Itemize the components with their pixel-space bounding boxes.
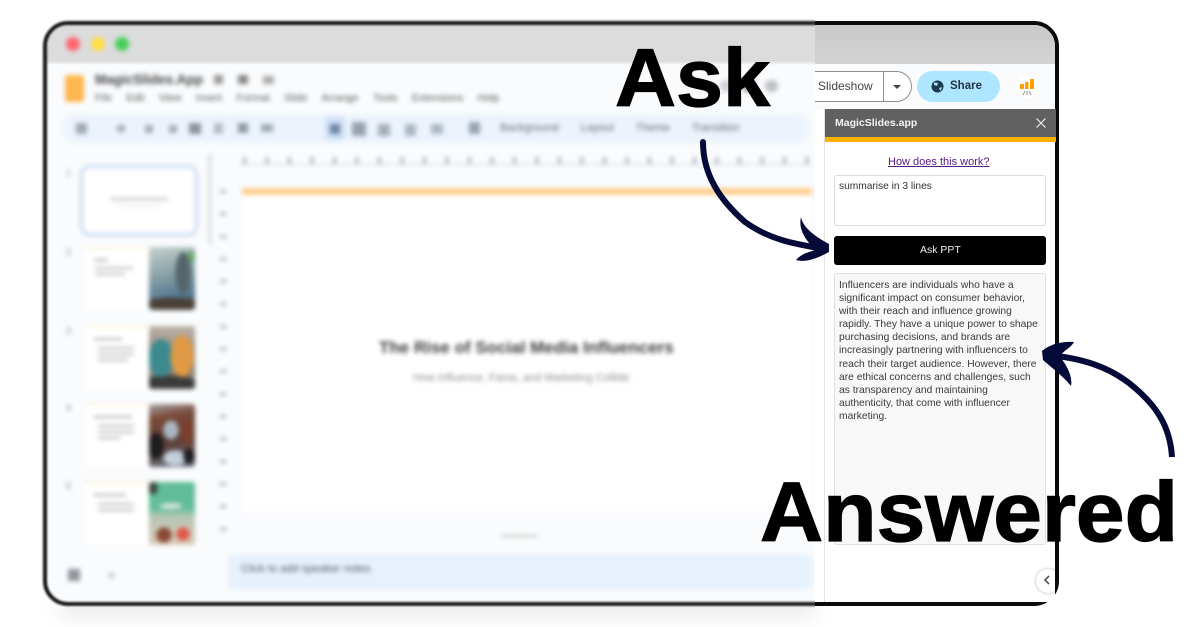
answer text: are ethical concerns and challenges, such [839, 372, 1031, 383]
slide numbers: 2 [66, 247, 71, 257]
help link: How does this work? [888, 156, 990, 168]
panel: MagicSlides sidebar [824, 109, 1055, 602]
slide numbers [64, 168, 73, 491]
notes resize handle [501, 535, 538, 537]
traffic lights [63, 34, 132, 54]
answer text: rapidly. They have a unique power to shape [839, 319, 1038, 330]
toolbar [62, 114, 810, 143]
collapse button [1034, 567, 1055, 595]
menu bar: File Edit View Insert Format Slide Arrange Tools Extensions Help [95, 92, 499, 104]
ask ppt button: Ask PPT [920, 244, 961, 256]
slideshow controls behind Ask [718, 78, 780, 95]
main slide canvas [242, 188, 812, 512]
heading: Answered: Answered [760, 465, 1178, 559]
slide numbers: 1 [66, 168, 71, 178]
answer text: authenticity, that come with influencer [839, 398, 1010, 409]
slide thumbnail 4 [85, 404, 195, 467]
slide thumbnail 5 [85, 482, 195, 545]
document title: MagicSlides.App [95, 72, 203, 87]
answer text [839, 280, 1038, 422]
window frame [41, 19, 815, 608]
vertical ruler [220, 190, 226, 535]
answer text: purchasing decisions, and brands are [839, 332, 1010, 343]
answer text: Influencers are individuals who have a [839, 280, 1014, 291]
answer text: significant impact on consumer behavior, [839, 293, 1025, 304]
answer text: increasingly partnering with influencers to [839, 345, 1028, 356]
icon: close [1036, 118, 1046, 128]
answer text: with their reach and influence growing [839, 306, 1012, 317]
question textarea: summarise in 3 lines [839, 181, 932, 192]
answer text: reach their target audience. However, there [839, 359, 1036, 370]
horizontal ruler [243, 157, 811, 165]
filmstrip view icons [64, 566, 116, 584]
toolbar: Background Layout Theme Transition [500, 122, 740, 134]
heading: Ask: Ask [615, 33, 770, 124]
answer text: marketing. [839, 411, 887, 422]
share button: Share [950, 80, 982, 92]
slideshow button [815, 71, 912, 102]
slide subtitle: How Influence, Fame, and Marketing Collide [413, 372, 629, 384]
slideshow button: Slideshow [818, 79, 873, 93]
share button [917, 71, 1000, 102]
answer text: as transparency and maintaining [839, 385, 988, 396]
filmstrip scrollbar [208, 154, 212, 244]
slide top accent bar [242, 188, 812, 195]
orange accent bar [825, 137, 1056, 142]
window frame right [715, 21, 1059, 606]
icon: globe [932, 80, 944, 92]
slide thumbnail 3 [85, 326, 195, 389]
slide numbers: 5 [66, 481, 71, 491]
speaker notes [228, 554, 812, 590]
question textarea [834, 175, 1046, 226]
window shadow [60, 590, 815, 608]
title icons [211, 72, 277, 88]
slide numbers: 3 [66, 326, 71, 336]
slide thumbnail 2 [85, 247, 195, 310]
answer textarea [834, 273, 1046, 545]
icon: magicslides addon [1020, 79, 1034, 96]
slide numbers: 4 [66, 403, 71, 413]
icon: slides logo [65, 75, 84, 102]
panel: blurred Google Slides window [41, 19, 815, 608]
slide title: The Rise of Social Media Influencers [379, 338, 674, 357]
panel: sharp extension side [815, 21, 1059, 606]
ask ppt button [834, 236, 1046, 265]
speaker notes: Click to add speaker notes [241, 563, 371, 575]
slide thumbnail 1 [80, 165, 198, 236]
arrow: ask to button [700, 139, 829, 261]
arrow: answered to text [1042, 342, 1175, 458]
sidebar header [825, 109, 1056, 137]
sidebar header: MagicSlides.app [835, 117, 917, 129]
